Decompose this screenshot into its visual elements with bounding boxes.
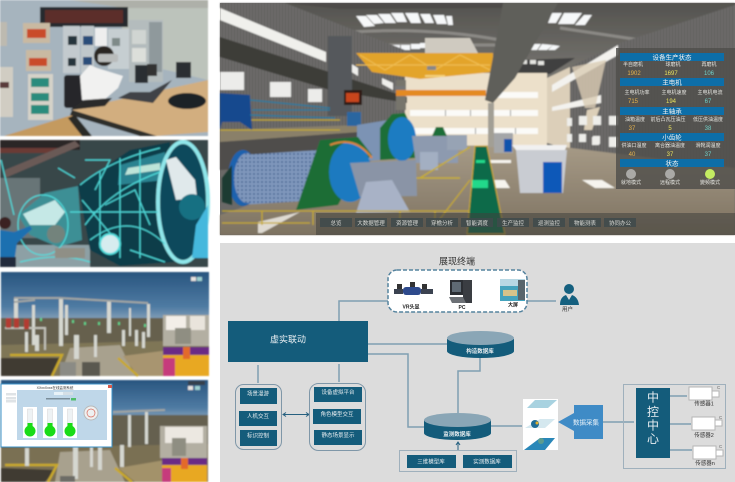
arrow block: data collection: 数据采集: [573, 418, 600, 426]
photo: substation with thermal insets: [1, 272, 209, 376]
arrow block: data collection: [558, 405, 603, 439]
box: central control: 中: [647, 390, 659, 404]
status panel: 67: [705, 99, 712, 105]
group: central control and sensors: [624, 384, 726, 468]
photo: substation with monitoring dialog: [1, 380, 208, 482]
group: left function list: [236, 384, 282, 450]
status panel: 油箱温度: [625, 116, 645, 123]
status panel: 194: [666, 99, 677, 105]
bottom menu bar: [316, 213, 735, 235]
bottom menu bar: 总览: [330, 219, 342, 227]
floor: [220, 145, 735, 235]
bottom menu bar: 大数据管理: [357, 219, 385, 227]
bottom menu bar: 智能调度: [466, 219, 488, 227]
photo: turbofan engine digital twin: [0, 140, 209, 267]
icon: sensor 1: 传感器1: [694, 400, 714, 408]
group: right function list: 角色模型交互: [320, 410, 354, 418]
bottom menu bar: 资源管理: [396, 219, 418, 227]
box: central control: 心: [647, 432, 659, 446]
icon: sensor 2: [692, 415, 723, 439]
right wall: [547, 5, 735, 170]
status panel: 前后凸瓦压油压: [650, 116, 686, 123]
icon: sensor n: 传感器n: [695, 459, 715, 467]
crane: [356, 53, 493, 79]
display terminals box: [388, 270, 527, 312]
icon: sensor 1: C: [717, 385, 721, 390]
status panel: [616, 48, 735, 189]
status panel: 远程模式: [660, 179, 680, 186]
group: model and data libraries: 实测数据库: [473, 458, 501, 466]
main roof beam: [485, 3, 558, 103]
database: monitoring: [424, 413, 491, 440]
status panel: 40: [629, 152, 636, 158]
status panel: 就地模式: [621, 179, 641, 186]
connectors: [258, 301, 692, 450]
status panel: 主电机速度: [661, 89, 687, 96]
status panel: 主电机功率: [624, 89, 650, 96]
bottom menu bar: 生产监控: [502, 219, 524, 227]
front mill: [240, 150, 322, 205]
icon: sensor n: C: [719, 444, 723, 449]
icon: user: 用户: [562, 305, 573, 313]
monitoring dialog: XXxxXxxx在线监测系统: [37, 385, 74, 390]
status panel: 5: [668, 126, 672, 132]
status panel: 状态: [666, 158, 679, 168]
icon: PC: PC: [459, 305, 466, 311]
bottom menu bar: 穿檐分析: [431, 219, 453, 227]
status panel: 715: [628, 99, 639, 105]
group: right function list: 静态场景显示: [321, 431, 355, 439]
arrow: bidirectional: [283, 412, 309, 416]
box: central control: 中: [647, 418, 659, 432]
photo: VR operator in control room: [0, 0, 208, 136]
status panel: 1902: [627, 71, 641, 77]
group: left function list: 人机交互: [247, 412, 269, 420]
icon: large screen: 大屏: [508, 302, 518, 308]
icon: sensor 2: C: [719, 415, 723, 420]
group: left function list: 标识控制: [247, 432, 269, 440]
box: central control: [636, 388, 670, 458]
status panel: 主电机: [662, 78, 682, 86]
status panel: 供油口温度: [621, 142, 647, 149]
left wall: [220, 3, 405, 155]
green walkway: [467, 146, 505, 234]
icon: user: [560, 284, 579, 313]
small building: [494, 133, 513, 153]
bottom menu bar: 协同办公: [609, 219, 631, 227]
status panel: 37: [667, 152, 674, 158]
group: left function list: 场景漫游: [247, 390, 269, 398]
status panel: 离合器油温度: [655, 142, 685, 149]
panel: system architecture diagram: [220, 243, 735, 482]
box: virtual-real linkage: [228, 321, 368, 362]
group: model and data libraries: 三维模型库: [417, 458, 445, 466]
icon: sensor 1: [689, 385, 721, 408]
status panel: 设备生产状态: [652, 52, 692, 62]
bottom menu bar: 物能测表: [574, 219, 596, 227]
bottom menu bar: 巡测监控: [538, 219, 560, 227]
group: model and data libraries: [400, 450, 516, 472]
icon: data layers: [523, 399, 558, 450]
heading: display terminals: 展现终端: [439, 256, 475, 266]
status panel: 變频模式: [700, 179, 720, 186]
status panel: 37: [629, 126, 636, 132]
dial gauge: [84, 406, 98, 420]
monitoring dialog: [1, 384, 112, 447]
group: right function list: 设备虚拟平台: [321, 388, 355, 396]
arrow: libraries to monitoring db: [456, 442, 460, 450]
group: right function list: [310, 384, 366, 450]
status panel: 球磨机: [665, 61, 681, 68]
status panel: 滑靴润温度: [695, 142, 721, 149]
status panel: 37: [705, 152, 712, 158]
icon: VR headset: VR头显: [403, 304, 419, 310]
database: monitoring: 监测数据库: [443, 430, 471, 438]
status panel: 1697: [664, 71, 678, 77]
distant mills: [357, 120, 396, 162]
database: structure: [447, 331, 514, 358]
box: virtual-real linkage: 虚实联动: [270, 334, 306, 344]
status panel: 半自磨机: [623, 61, 643, 68]
ceiling: [220, 3, 735, 83]
icon: sensor n: [693, 444, 723, 467]
back wall: [405, 73, 547, 146]
panel: 3D factory scene: [220, 3, 735, 235]
box: central control: 控: [647, 405, 659, 419]
status panel: 38: [705, 126, 712, 132]
status panel: 主电机电流: [697, 89, 723, 96]
thermometer gauges: [23, 407, 77, 438]
status panel: 主轴承: [662, 106, 682, 116]
status panel: 小齿轮: [662, 132, 682, 142]
status panel: 106: [704, 71, 715, 77]
status panel: 低压供油温度: [693, 116, 723, 123]
status panel: 再磨机: [701, 61, 717, 68]
database: structure: 构造数据库: [466, 347, 494, 355]
icon: sensor 2: 传感器2: [694, 431, 714, 439]
